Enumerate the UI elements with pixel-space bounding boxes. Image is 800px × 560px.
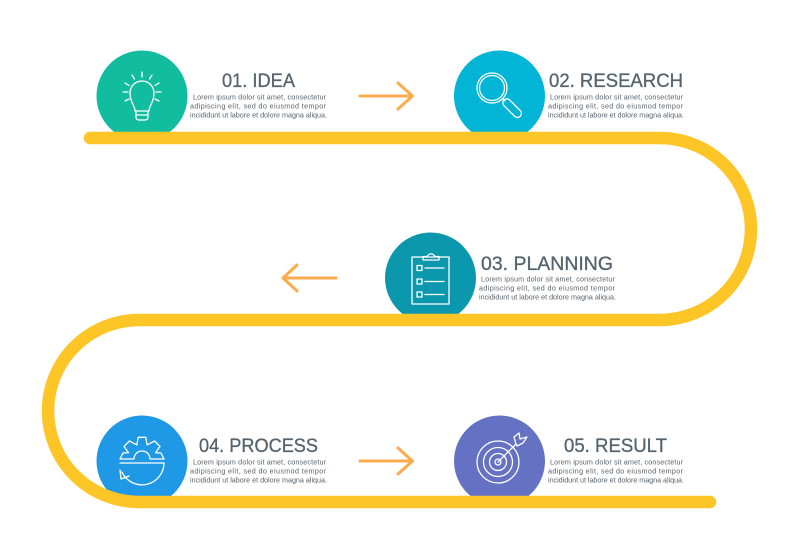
icon: gear and cycle arrow [120,437,164,485]
step 5: result [454,416,684,506]
text: research description: incididunt ut labore et dolore magna aliqua. [548,110,684,120]
winding yellow track [48,138,751,502]
step 2: research [454,50,684,142]
text: research description: adipiscing elit, sed do eiusmod tempor [548,102,684,110]
circle: research [454,50,545,142]
step 3: planning [385,232,616,324]
heading: 02. research: 02. RESEARCH [549,71,683,92]
step 4: process [96,416,327,506]
icon: target with dart [477,433,527,483]
icon: light bulb [123,72,161,120]
step 1: idea [96,50,327,142]
circle: process [96,416,188,506]
text: planning description: adipiscing elit, sed do eiusmod tempor [479,284,616,292]
text: planning description: incididunt ut labore et dolore magna aliqua. [479,292,616,302]
text: planning description [479,274,616,302]
text: idea description: Lorem ipsum dolor sit amet, consectetur [193,92,327,102]
heading: 01. idea: 01. IDEA [222,71,295,92]
circle: planning [385,232,476,324]
text: process description [190,458,327,484]
icon: magnifying glass [477,73,523,119]
text: idea description [190,92,327,120]
heading: 03. planning: 03. PLANNING [481,254,613,275]
text: idea description: adipiscing elit, sed do eiusmod tempor [190,102,327,110]
circle: idea [96,50,188,142]
text: result description: Lorem ipsum dolor sit amet, consectetur [550,458,684,466]
arrow: right from process to result [360,448,412,474]
text: planning description: Lorem ipsum dolor sit amet, consectetur [481,274,616,284]
heading: 04. process: 04. PROCESS [199,436,318,457]
text: process description: incididunt ut labore et dolore magna aliqua. [190,476,327,484]
text: process description: adipiscing elit, sed do eiusmod tempor [190,466,327,476]
circle: result [454,416,545,506]
heading: 05. result: 05. RESULT [564,436,667,457]
text: result description: incididunt ut labore et dolore magna aliqua. [548,476,684,484]
text: process description: Lorem ipsum dolor sit amet, consectetur [193,458,327,466]
text: research description: Lorem ipsum dolor sit amet, consectetur [550,92,684,102]
text: research description [548,92,684,120]
text: result description [548,458,684,484]
arrow: left from planning [283,265,336,291]
text: result description: adipiscing elit, sed do eiusmod tempor [548,466,684,476]
text: idea description: incididunt ut labore et dolore magna aliqua. [190,110,327,120]
arrow: right from idea to research [360,83,412,109]
icon: clipboard checklist [412,254,449,304]
